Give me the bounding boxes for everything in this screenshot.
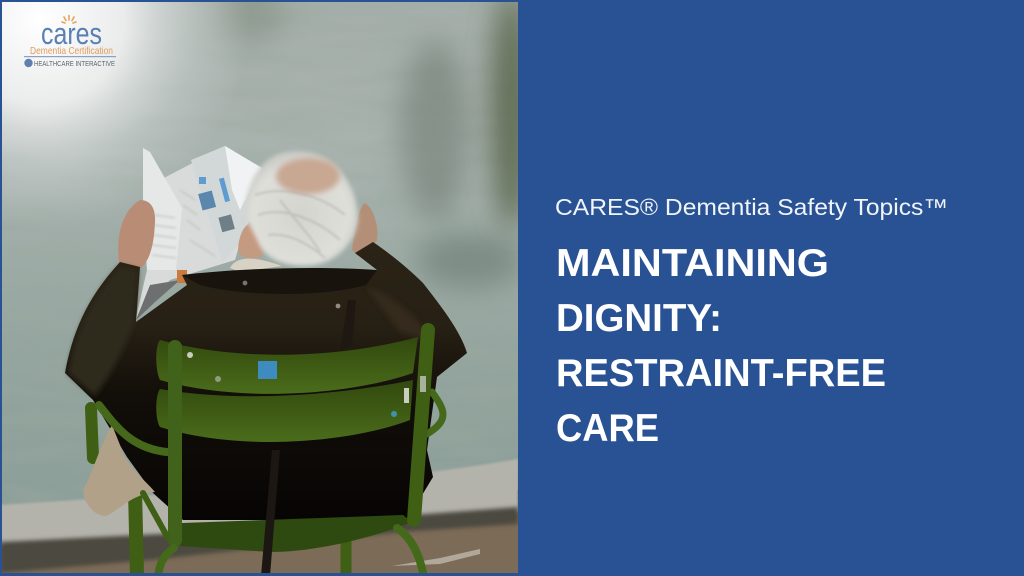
white hair and head — [243, 151, 358, 266]
lower backrest slat — [156, 380, 413, 442]
chair posts and legs — [143, 330, 428, 576]
ground — [0, 490, 518, 576]
upper backrest slat — [156, 337, 418, 394]
armrests — [99, 392, 443, 452]
blue paint chip — [258, 361, 277, 379]
right hand — [352, 203, 378, 256]
title — [556, 242, 886, 450]
title: CARE — [556, 407, 659, 450]
title: RESTRAINT-FREE — [556, 352, 886, 395]
jacket body — [65, 242, 467, 520]
logo divider — [24, 56, 116, 57]
logo company mark — [24, 59, 33, 67]
stone ledge top surface — [0, 459, 518, 547]
ear and face — [238, 222, 264, 258]
ground highlight — [392, 549, 480, 566]
logo tagline: Dementia Certification — [30, 45, 113, 57]
strap hanging below the chair — [261, 450, 280, 576]
water background — [2, 0, 534, 522]
back chair legs and left arm post — [91, 408, 346, 576]
seat — [180, 515, 412, 552]
cloth draped over the chair — [83, 425, 155, 516]
scarf — [230, 258, 282, 270]
logo wordmark: cares — [41, 16, 102, 51]
logo — [24, 16, 116, 68]
logo sun rays — [62, 16, 76, 23]
title: DIGNITY: — [556, 297, 722, 340]
green chair — [99, 330, 443, 576]
paint marks — [187, 352, 426, 417]
photo: elderly man reading newspaper on a green chair — [0, 0, 534, 576]
subtitle: CARES® Dementia Safety Topics™ — [555, 194, 948, 220]
title: MAINTAINING — [556, 242, 829, 285]
stone ledge shadow band — [0, 507, 518, 573]
logo company name: HEALTHCARE INTERACTIVE — [34, 59, 115, 68]
left hand — [118, 200, 155, 268]
newspaper — [135, 146, 262, 322]
